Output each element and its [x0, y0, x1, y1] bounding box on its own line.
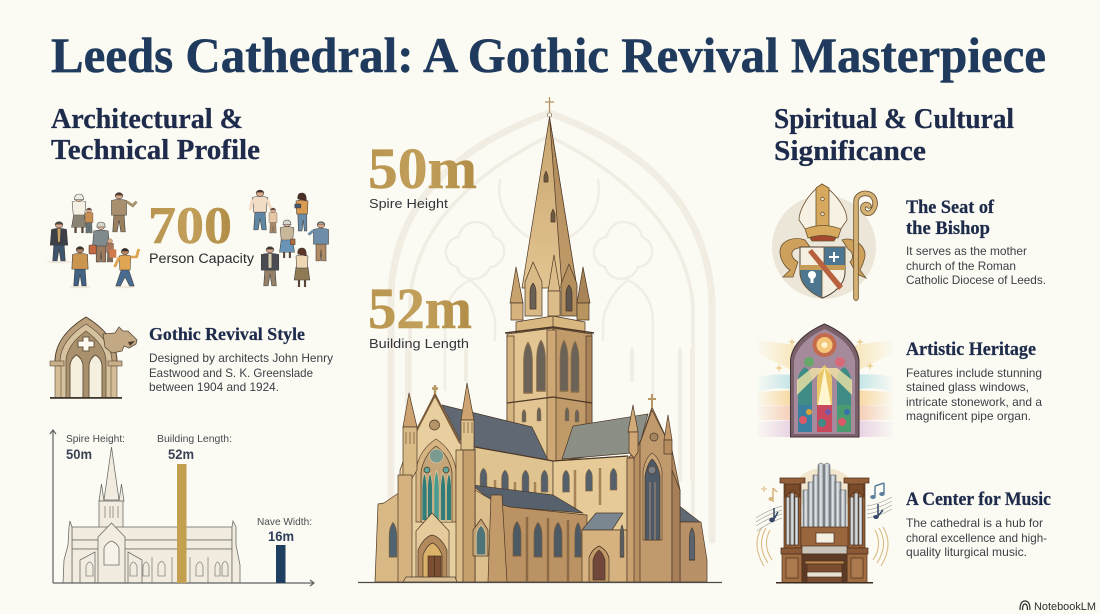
- aisle roof: [472, 485, 583, 513]
- lancets: [798, 365, 851, 432]
- pipes: [803, 463, 846, 538]
- porch: [416, 513, 449, 582]
- heading: architectural and technical profile: [51, 104, 260, 166]
- navy bar: [276, 545, 286, 583]
- text: a center for music: choral excellence and high-: [906, 531, 1047, 545]
- heading: spiritual and cultural significance: [774, 104, 1014, 167]
- mitre: [799, 184, 847, 236]
- title: Leeds Cathedral: A Gothic Revival Masterpiece: [51, 27, 1046, 83]
- quatrefoil: [78, 337, 94, 351]
- text: artistic heritage: Artistic Heritage: [906, 339, 1036, 360]
- axes: [50, 430, 314, 586]
- text: a center for music: [906, 489, 1051, 559]
- right transept roof: [562, 414, 648, 459]
- lower aisle wall: [475, 490, 587, 582]
- text: 700 person capacity: [148, 197, 254, 266]
- bar labels: 16m: [268, 529, 294, 544]
- tower: [505, 316, 594, 462]
- text: gothic revival style: Designed by architects John Henry: [149, 351, 333, 365]
- right transept facade: [627, 394, 680, 582]
- ground line: [358, 582, 722, 584]
- bar labels: Nave Width:: [257, 516, 312, 528]
- background arch watermark: [391, 113, 712, 540]
- illustration: cathedral: [358, 97, 722, 582]
- text: 700 person capacity: Person Capacity: [149, 251, 254, 266]
- text: the seat of the bishop: church of the Roman: [906, 259, 1016, 273]
- light rays: [757, 340, 795, 437]
- heading: spiritual and cultural significance: Significance: [774, 136, 926, 167]
- console: [781, 548, 868, 554]
- text: artistic heritage: intricate stonework, and a: [906, 395, 1042, 409]
- text: artistic heritage: [906, 339, 1042, 423]
- bar labels: [66, 433, 312, 544]
- text: the seat of the bishop: The Seat of: [906, 197, 995, 218]
- ribbons: [780, 238, 810, 277]
- icon: crowd of people left: [46, 193, 139, 288]
- gargoyle: [103, 327, 137, 353]
- text: a center for music: quality liturgical music.: [906, 545, 1027, 559]
- centre case: [801, 527, 848, 547]
- shield: [800, 247, 845, 298]
- text: gothic revival style: Gothic Revival Style: [149, 324, 305, 344]
- text: a center for music: A Center for Music: [906, 489, 1051, 510]
- icon: gothic window with gargoyle: [50, 317, 137, 399]
- text: gothic revival style: Eastwood and S. K. Greenslade: [149, 366, 313, 380]
- notebooklm watermark: NotebookLM: [1034, 601, 1096, 613]
- church outline: [63, 447, 240, 583]
- icon: crowd of people right: [250, 190, 328, 287]
- text: artistic heritage: stained glass windows,: [906, 380, 1029, 394]
- icon: pipe organ with music notes: [756, 463, 892, 584]
- right aisle: [678, 505, 707, 582]
- text: artistic heritage: Features include stunning: [906, 366, 1042, 380]
- crozier: [856, 193, 875, 298]
- text: gothic revival style: [149, 324, 333, 394]
- staves: [756, 497, 892, 531]
- heading: architectural and technical profile: Technical Profile: [51, 135, 260, 166]
- nave walls: [475, 447, 628, 530]
- bar labels: 50m: [66, 447, 92, 462]
- icon: bishop mitre, crest and crozier: [772, 184, 876, 299]
- stat: building length: 52m: [368, 276, 472, 341]
- stat: spire height: Spire Height: [369, 196, 448, 211]
- sparkles: [775, 338, 874, 372]
- bar labels: Spire Height:: [66, 433, 125, 445]
- music notes: [761, 483, 885, 522]
- text: the seat of the bishop: the Bishop: [906, 218, 990, 239]
- stat: building length: Building Length: [369, 336, 469, 351]
- spire: [522, 97, 577, 288]
- bar labels: Building Length:: [157, 433, 232, 445]
- window frame: [790, 324, 859, 437]
- left facade: [375, 383, 507, 582]
- chart: dimensions comparison: [50, 430, 314, 586]
- heading: spiritual and cultural significance: Spiritual & Cultural: [774, 104, 1014, 135]
- text: a center for music: The cathedral is a hub for: [906, 516, 1043, 530]
- left turret: [403, 393, 417, 427]
- text: artistic heritage: magnificent pipe organ.: [906, 409, 1031, 423]
- icon: stained glass window with rainbow rays: [757, 324, 893, 437]
- left case: [780, 478, 869, 583]
- bar labels: 52m: [168, 447, 194, 462]
- right porch and low roof: [582, 513, 628, 582]
- sound arcs: [757, 527, 888, 566]
- right case: [844, 478, 869, 548]
- great window: [416, 439, 456, 522]
- heading: architectural and technical profile: Architectural &: [51, 104, 243, 135]
- text: the seat of the bishop: Catholic Diocese of Leeds.: [906, 273, 1046, 287]
- buttress: [488, 495, 507, 582]
- left nave roof: [442, 405, 548, 460]
- text: 700 person capacity: 700: [148, 197, 232, 255]
- stat: spire height: 50m: [368, 136, 477, 201]
- pinnacles and lucarnes: [510, 255, 590, 320]
- text: the seat of the bishop: [906, 197, 1046, 287]
- gold bar: [177, 464, 186, 583]
- right turret: [461, 383, 474, 420]
- side lancet: [473, 519, 488, 556]
- text: the seat of the bishop: It serves as the mother: [906, 244, 1027, 258]
- text: gothic revival style: between 1904 and 1924.: [149, 380, 279, 394]
